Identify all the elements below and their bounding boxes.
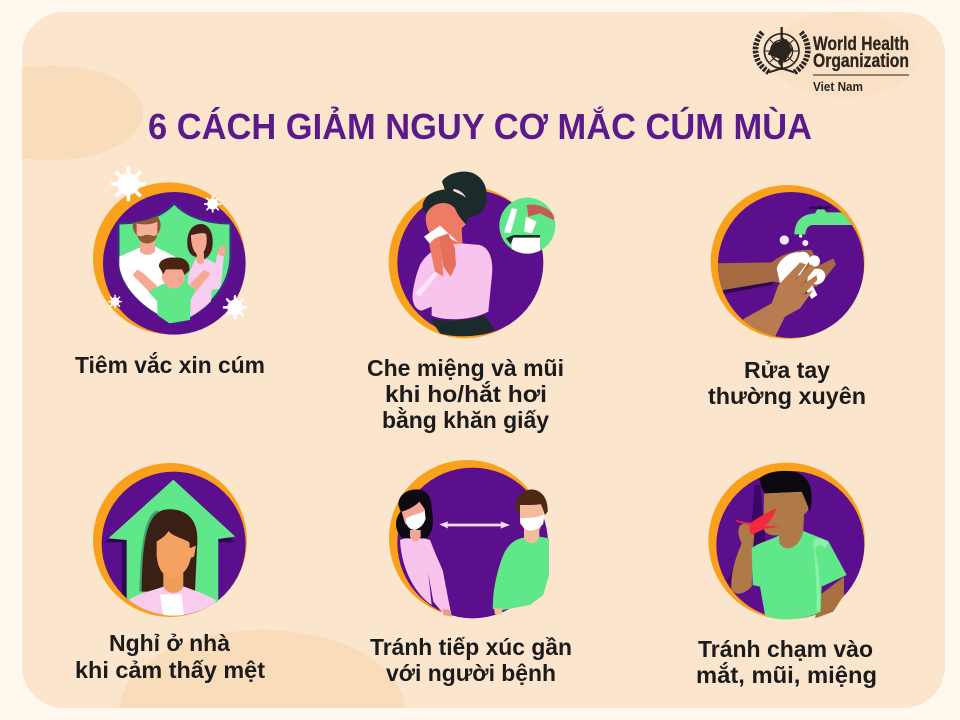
panel: cover mouth and nose bbox=[389, 172, 555, 338]
label: avoid close contact: với người bệnh bbox=[386, 660, 556, 686]
title: 6 CÁCH GIẢM NGUY CƠ MẮC CÚM MÙA bbox=[148, 105, 812, 147]
icon: orange and purple circle bbox=[389, 460, 548, 618]
icon: orange and purple circle bbox=[711, 185, 865, 339]
panel: avoid close contact bbox=[389, 460, 549, 618]
label: vaccination: Tiêm vắc xin cúm bbox=[75, 351, 265, 378]
label: avoid touching face bbox=[696, 636, 877, 688]
label: avoid touching face: mắt, mũi, miệng bbox=[696, 661, 877, 688]
icon: virus particles bbox=[109, 168, 246, 318]
icon: woman wearing mask bbox=[396, 489, 452, 617]
icon: woman sneezing into tissue bbox=[412, 172, 495, 336]
logo text: Organization bbox=[813, 51, 909, 72]
icon: green house bbox=[104, 480, 235, 615]
icon: orange and purple circle bbox=[708, 463, 865, 619]
label: avoid close contact bbox=[370, 634, 572, 686]
panel: wash hands bbox=[711, 185, 865, 339]
label: avoid close contact: Tránh tiếp xúc gần bbox=[370, 634, 572, 660]
icon: man wearing mask bbox=[493, 489, 549, 614]
panel: avoid touching face bbox=[708, 463, 865, 619]
label: stay home bbox=[75, 630, 265, 683]
logo: World Health Organization Viet Nam bbox=[756, 27, 909, 94]
icon: WHO emblem bbox=[756, 27, 808, 72]
man bbox=[119, 246, 176, 314]
logo text: World Health bbox=[813, 34, 909, 55]
icon: shield with family bbox=[118, 203, 231, 323]
label: cover mouth and nose: khi ho/hắt hơi bbox=[385, 380, 547, 407]
icon: woman with long hair bbox=[128, 509, 216, 618]
panel: flu vaccination bbox=[93, 168, 246, 335]
woman bbox=[188, 259, 220, 317]
label: stay home: Nghỉ ở nhà bbox=[109, 630, 230, 656]
icon: tissue into bin bbox=[499, 198, 555, 254]
label: cover mouth and nose: Che miệng và mũi bbox=[367, 355, 564, 381]
label: wash hands: thường xuyên bbox=[708, 383, 866, 409]
label: wash hands bbox=[708, 357, 866, 409]
icon: orange and purple circle bbox=[93, 182, 246, 335]
logo text bbox=[813, 34, 909, 94]
icon: orange and purple circle bbox=[93, 463, 247, 617]
icon: washing hands bbox=[713, 250, 836, 338]
label: stay home: khi cảm thấy mệt bbox=[75, 657, 265, 683]
label: wash hands: Rửa tay bbox=[744, 357, 830, 383]
logo text: Viet Nam bbox=[813, 79, 863, 94]
icon: soap bubbles bbox=[780, 234, 808, 246]
icon: green tap bbox=[794, 206, 857, 234]
label: cover mouth and nose bbox=[367, 355, 564, 433]
label: avoid touching face: Tránh chạm vào bbox=[698, 636, 873, 662]
boy bbox=[133, 269, 157, 293]
panel: stay home bbox=[93, 463, 247, 618]
icon: orange and purple circle bbox=[389, 186, 543, 338]
icon: man touching face bbox=[727, 471, 847, 619]
label: cover mouth and nose: bằng khăn giấy bbox=[382, 406, 549, 433]
icon: two-way distance arrow bbox=[439, 521, 510, 529]
